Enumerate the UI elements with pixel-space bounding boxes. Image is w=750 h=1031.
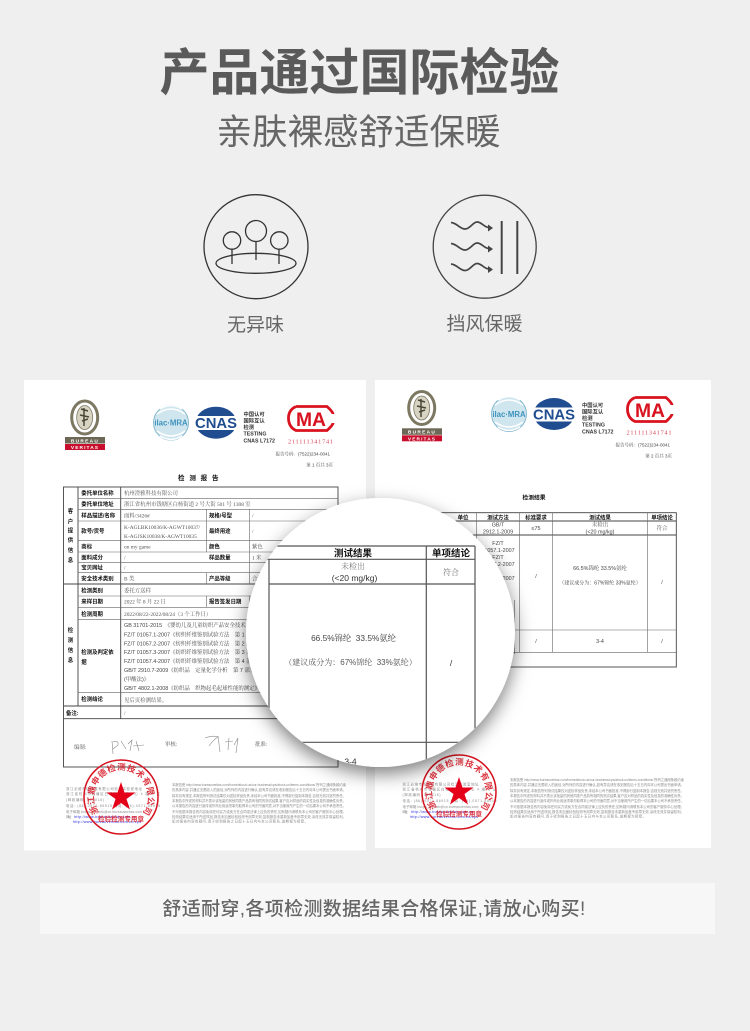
table body: GB/T [492,522,505,528]
panel: test report page 2 [375,380,711,848]
magnified pilling grade: 3-4 [344,756,357,766]
logo: Bureau Veritas: BUREAU [408,430,436,436]
signatures: 审核: [165,740,178,748]
row values: FZ/T 01057.4-2007《纺织纤维鉴别试验方法 第 4 部分》 [124,657,262,665]
magnifier lens [240,498,515,790]
side labels: 信 [68,646,74,654]
footer: terms [510,777,685,818]
row values: / [252,529,254,535]
row values: on my game [124,544,151,550]
table header: 测试方法 [487,513,509,521]
row labels: 最终用途 [209,527,231,535]
row values: / [124,556,126,562]
page number: 第 2 页共 3页 [645,452,672,460]
footer: terms: 本报告中所述的材料并不表示该批量的其他同类产品具有相同的测试结果,客户应对样品的真实性及信息的准确性负责。 [510,793,684,798]
label: windproof warmth: 挡风保暖 [446,313,523,335]
footer: lab address: http://www.bureauveritas.com.cn [74,815,136,819]
table body: 2912.1-2009 [483,530,513,536]
row values [124,489,263,717]
subtitle: 亲肤裸感舒适保暖 [216,112,501,152]
footer: lab address: 网址: [66,814,72,819]
footer: terms: 检测结果仅适用于所送样品,报告未加盖检验检测专用章无效,复制报告未重新加盖专用章无效,涂改无效并保留权利。 [510,809,684,814]
accreditation text: CNAS L7172 [244,438,275,444]
row labels: 检测类别 [81,586,103,594]
table body: 未检出 [592,520,608,528]
logo: Bureau Veritas [402,392,442,442]
results heading: 检测结果 [522,494,546,502]
side labels: 户 [68,518,73,526]
magnified result: not detected: 未检出 [341,561,365,571]
logo: CMA: MA [635,401,665,422]
magnified recommendation: （建议成分为：67%锦纶 33%氨纶） [284,657,417,667]
magnified table [267,545,476,764]
footer: terms: 除非另有规定,本报告所列测试结果仅对送检样品负责,未经本公司书面批准,不得部分复制本报告,否则无效并追究责任。 [172,793,346,798]
row labels [66,489,242,717]
side labels: 供 [68,536,74,544]
footer: lab address: (邮政编码: 310018) [402,792,440,797]
row values: 浙江省杭州市钱塘区白杨街道 2 号大街 501 号 1308 室 [124,500,251,508]
accreditation text: CNAS L7172 [582,430,614,436]
side labels: 检 [68,626,74,634]
row values: K-AGJSK10038/K-AGWT10035 [124,534,197,540]
table body [481,520,668,645]
footer: terms [172,782,347,824]
row labels: 样品数量 [209,554,231,562]
table header: 单项结论 [651,513,673,521]
side labels: 信 [68,546,74,554]
report heading: 检 测 报 告 [178,473,220,482]
magnified table: (<20 mg/kg) [332,573,377,583]
page number: 第 1 页共 3页 [306,462,333,468]
row values: 见后页检测结果。 [124,696,167,704]
label: no odour: 无异味 [227,314,284,336]
side labels: 息 [68,656,74,664]
logo: CMA: MA [296,410,326,431]
row labels: 委托单位地址 [81,500,114,508]
row labels: 检测周期 [81,610,103,618]
row labels: 产品等级 [209,574,231,582]
row values: 面料/3426# [124,512,150,520]
magnified conclusion: pass: 符合 [443,567,459,577]
table body: 3-4 [596,639,604,645]
results table [440,513,676,667]
side labels: 客 [68,507,74,515]
magnified header: 测试结果 [334,548,372,560]
footer: terms: 以本报告的内容进行宣传或作商业用途须事先取得本公司的书面同意,对不当使用所产生的一切后果本公司不承担责任。 [172,803,346,808]
row values: (甲酸法)》 [124,675,149,683]
table body: / [535,574,537,580]
row values: B 类 [124,574,135,582]
row values: / [124,566,126,572]
footer: lab address: 浙江省杭州市钱塘区白杨街道检测中心 4 楼 C 区 [402,786,497,792]
side labels [68,507,74,664]
logo: Bureau Veritas [65,401,105,451]
accreditation text: TESTING [244,432,266,438]
row labels: 规格/号型 [209,512,233,520]
side labels: 测 [68,636,74,644]
table body: / [661,580,663,586]
table header: 单位 [458,513,469,521]
table body: 01057.2-2007 [481,562,515,568]
footer: terms: 如对报告内容有疑问,请于收到报告之日起十五日内与本公司联系,逾期视为接受。 [172,818,308,824]
logo: CNAS [194,407,238,439]
row labels: 安全技术类别 [81,574,114,582]
logo: Bureau Veritas: VERITAS [408,436,436,442]
title: 产品通过国际检验 [160,45,560,101]
logo: CNAS: CNAS [533,406,575,424]
logo: ilac-MRA [154,405,188,440]
row values: FZ/T 01057.2-2007《纺织纤维鉴别试验方法 第 2 部分》 [124,640,262,648]
row values: GB 31701-2015 《婴幼儿及儿童纺织产品安全技术规范》 [124,621,262,629]
logo: CNAS [532,398,576,430]
footer: terms: 检测结果仅适用于所送样品,报告未加盖检验检测专用章无效,复制报告未重新加盖专用章无效,涂改无效并保留权利。 [172,814,346,819]
bottom banner: 舒适耐穿,各项检测数据结果合格保证,请放心购买! [162,898,586,920]
bottom banner [40,883,715,934]
table header: 测试结果 [589,513,611,521]
footer: terms: 不可依据本报告的内容免除任何买方或卖方在合同或法律上应负的责任,如有疑问请联系本公司的客户服务中心处理。 [510,804,684,809]
logo: CNAS: CNAS [195,415,237,432]
table header: 标准要求 [525,513,547,521]
magnified table: 单项结论 [432,548,470,560]
magnified composition: 66.5%锦纶 33.5%氨纶 [311,633,397,643]
logo: Bureau Veritas: VERITAS [71,445,99,451]
footer: terms: 本报告受 http://www.bureauveritas.com/home/about-us/our-business/cps/about-us/terms-conditions/ 所列之通用条款约束 [510,777,685,782]
row labels: 款号/货号 [81,527,105,535]
stamp [83,759,159,835]
row values: 2022 年 8 月 22 日 [124,598,166,606]
accreditation text [244,410,275,444]
stamp: 浙江鼎申德检测技术有限公司 [87,762,155,816]
footer: lab address: http://www.bureauveritas.com.cn/cps [73,820,141,824]
accreditation text [582,401,614,436]
report table [64,487,338,767]
row labels: 委托单位名称 [81,489,114,497]
row values: GB/T 4802.1-2008《纺织品 织物起毛起球性能的测定》 [124,684,260,692]
report number: 报告号码：(7522)234-0041 [275,450,330,458]
table body: FZ/T [492,555,504,561]
logo: Bureau Veritas: BUREAU [71,438,99,444]
icon: no odour [204,195,308,299]
logo: ilac-MRA: ilac·MRA [492,410,526,419]
footer: lab address: (邮政编码: 310018) [66,797,104,802]
row labels: 商标 [81,542,93,550]
row labels: 宝贝网址 [81,564,103,572]
footer: lab address: 电话: (86)-0571-86915 传真: (86)-0571-86915 [402,798,497,803]
table body: (<20 mg/kg) [586,530,615,536]
signatures: 批准: [255,740,268,748]
row values: K-AGLBK10036/K-AGWT10037/ [124,525,201,531]
footer: terms: 的具体内容,并通过无限收入的途径,对所列的内容进行确认,如有异议请在收到报告后十五日内向本公司提出书面申请。 [510,782,684,787]
accreditation text: 检测 [244,423,254,431]
row values: 2022/08/22-2022/08/24（3 个工作日） [124,610,211,618]
footer: lab address [402,782,497,819]
logo: CMA [626,398,672,436]
logo: ilac-MRA [492,396,526,432]
footer: lab address: 浙江省杭州市钱塘区白杨街道检测中心 4 楼 C 区 [66,791,161,796]
logo: ilac-MRA: ilac·MRA [154,418,188,428]
signatures [74,736,268,754]
report number: 报告号码：(7522)234-0041 [615,442,670,448]
row values: 紫色 [252,542,263,550]
accreditation text: 中国认可 [244,410,265,418]
icon: windproof warmth [433,195,536,298]
row values: 委托方送样 [124,586,152,594]
row labels: 检测结论 [81,695,103,703]
stamp: 浙江鼎申德检测技术有限公司 [425,758,493,811]
side labels: 提 [68,526,74,534]
row labels: 颜色 [209,542,220,550]
footer: lab address: 网址: [402,809,409,814]
footer: terms: 的具体内容,并通过无限收入的途径,对所列的内容进行确认,如有异议请在收到报告后十五日内向本公司提出书面申请。 [172,787,346,792]
footer: lab address: 电子邮箱 bvcps_zh_info@cn.bureauveritas.com [66,809,142,814]
row labels: 样品描述/名称 [81,512,116,520]
footer: terms: 除非另有规定,本报告所列测试结果仅对送检样品负责,未经本公司书面批准,不得部分复制本报告,否则无效并追究责任。 [510,788,684,793]
stamp: 检验检测专用章 [98,814,144,823]
row values: 合格 [252,574,263,582]
row labels: 报告签发日期 [209,598,242,606]
footer: lab address: http://www.bureauveritas.com.cn [411,810,473,814]
footer: terms: 如对报告内容有疑问,请于收到报告之日起十五日内与本公司联系,逾期视为接受。 [510,814,646,818]
footer: lab address: 电话: (86)-0571-86915 传真: (86)-0571-86915 [66,803,160,808]
stamp [421,754,497,830]
footer: terms: 本报告中所述的材料并不表示该批量的其他同类产品具有相同的测试结果,客户应对样品的真实性及信息的准确性负责。 [172,798,346,803]
table body: 符合 [657,524,668,532]
footer: lab address: 浙江必维市场科技有限公司检测实验室地址 [402,782,479,786]
magnified slash: / [450,658,453,668]
side labels: 息 [68,556,74,564]
row values: FZ/T 01057.1-2007《纺织纤维鉴别试验方法 第 1 部分》 [124,630,262,638]
table body: 01057.1-2007 [481,548,515,554]
row labels: 检测及判定依 [81,648,114,656]
table body: 66.5%锦纶 33.5%氨纶 [573,564,627,572]
footer: lab address: http://www.bureauveritas.com.cn/cps [410,815,478,819]
table body: FZ/T [492,541,504,547]
row values: / [252,514,254,520]
table header [458,513,673,521]
row values: 杭州澄雅科技有限公司 [124,489,178,497]
logo: CMA: 211111341741 [626,430,672,436]
footer: lab address: 电子邮箱 bvcps_zh_info@cn.bureauveritas.com [402,804,479,809]
row labels: 来样日期 [81,598,103,606]
row values: GB/T 2910.7-2009《纺织品 定量化学分析 第 7 部分》 [124,666,260,674]
table body: （建议成分为：67%锦纶 33%氨纶） [559,580,641,586]
row values: FZ/T 01057.3-2007《纺织纤维鉴别试验方法 第 3 部分》 [124,648,262,656]
footer: lab address [66,786,161,824]
logo: CMA [288,406,333,446]
table body: ≤75 [532,526,540,532]
accreditation text: 国际互认 [582,408,604,416]
row labels: 据 [81,658,87,666]
signatures: 编制: [74,743,87,751]
row labels: 面料成分 [81,554,103,562]
footer: terms: 以本报告的内容进行宣传或作商业用途须事先取得本公司的书面同意,对不当使用所产生的一切后果本公司不承担责任。 [510,798,684,803]
table body: / [535,639,537,645]
accreditation text: 检测 [582,414,593,422]
accreditation text: 国际互认 [244,416,265,424]
row values: / [124,711,126,717]
accreditation text: TESTING [582,422,605,428]
footer: terms: 不可依据本报告的内容免除任何买方或卖方在合同或法律上应负的责任,如有疑问请联系本公司的客户服务中心处理。 [172,809,346,814]
row values: 1 米 [252,554,262,562]
table body: / [661,639,663,645]
row labels: 备注: [66,709,79,717]
footer: lab address: 浙江必维市场科技有限公司检测实验室地址 [66,786,143,791]
footer: terms: 本报告受 http://www.bureauveritas.com/home/about-us/our-business/cps/about-us/terms-conditions/ 所列之通用条款约束 [172,782,347,787]
stamp: 检验检测专用章 [436,809,482,818]
panel: test report page 1 [24,380,366,850]
accreditation text: 中国认可 [582,401,604,409]
logo: CMA: 211111341741 [288,438,333,446]
table body: 01057.3-2007 [481,576,515,582]
